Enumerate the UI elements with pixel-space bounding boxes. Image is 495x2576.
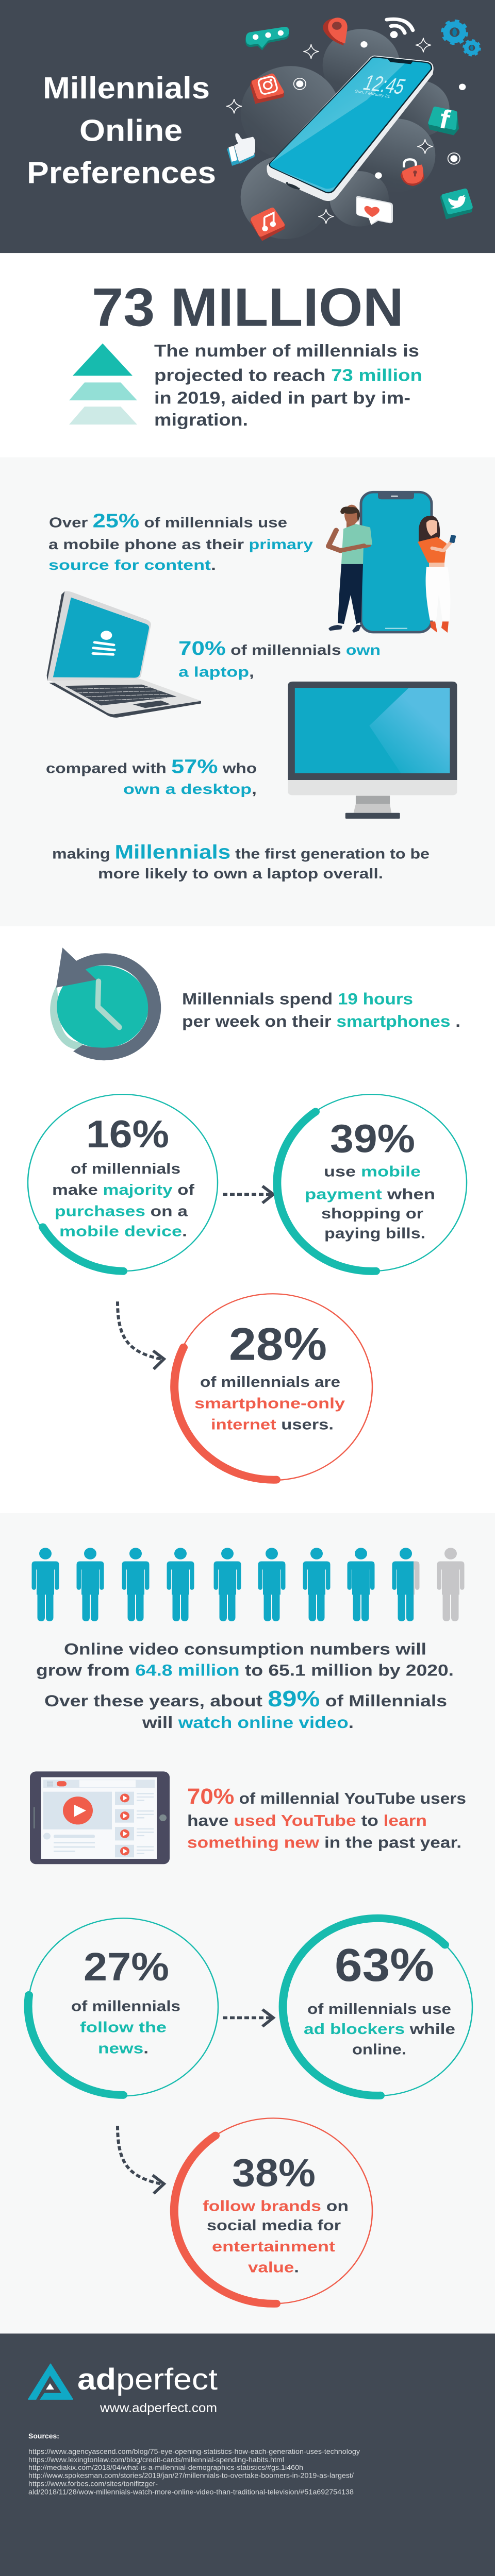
text: online video consumption: grow from 64.8 million to 65.1 million by 2020. bbox=[36, 1661, 454, 1679]
stat circle: 39 percent bbox=[277, 1094, 467, 1271]
arrow: 27 percent to 63 percent bbox=[223, 2009, 273, 2026]
stat circle: 16 percent: of millennials bbox=[71, 1161, 180, 1177]
text: sources: https://www.agencyascend.com/blog/75-eye-opening-statistics-how-each-generation-uses-technology bbox=[28, 2447, 360, 2455]
title: Millennials Online Preferences: Online bbox=[79, 114, 183, 147]
text: first generation to own a laptop: more likely to own a laptop overall. bbox=[98, 866, 383, 882]
figure: woman bbox=[418, 516, 456, 633]
text: sources: Sources: bbox=[28, 2432, 59, 2440]
text: 25 percent mobile phone: source for content . bbox=[48, 557, 216, 573]
stat circle: 63 percent: 63% bbox=[335, 1939, 434, 1991]
icon: smartphone: 12:45 bbox=[360, 71, 409, 99]
icon: facebook: f bbox=[437, 104, 453, 135]
stat circle: 27 percent bbox=[28, 1918, 218, 2096]
text: website: www.adperfect.com bbox=[100, 2400, 217, 2415]
icon: clock with arrow bbox=[50, 947, 161, 1060]
icon: laptop bbox=[47, 591, 201, 718]
stat circle: 16 percent bbox=[28, 1094, 218, 1271]
text: sources: http://mediakix.com/2018/04/what-is-a-millennial-demographics-statistics/#gs.1i460h bbox=[28, 2463, 303, 2471]
text: sources: ald/2018/11/28/wow-millennials-watch-more-online-video-than-traditional-television/#51a692754138 bbox=[28, 2488, 354, 2496]
arrow: curved to 28 percent bbox=[118, 1301, 164, 1369]
stat circle: 27 percent: news . bbox=[98, 2041, 148, 2057]
logo: adperfect: adperfect bbox=[77, 2363, 218, 2396]
text: online video consumption: will watch online video . bbox=[142, 1713, 354, 1732]
icon: gears bbox=[442, 21, 480, 55]
text: YouTube to learn: have used YouTube to learn bbox=[187, 1811, 427, 1829]
text: 57 percent own a desktop: own a desktop , bbox=[123, 782, 257, 798]
text: sources: https://www.forbes.com/sites/tonifitzger- bbox=[28, 2480, 158, 2488]
stat circle: 28 percent: 28% bbox=[229, 1318, 327, 1370]
icon: twitter bbox=[440, 189, 473, 219]
stat circle: 16 percent: purchases on a bbox=[55, 1203, 188, 1219]
stat circle: 38 percent bbox=[174, 2118, 372, 2303]
arrow: curved to 38 percent bbox=[118, 2126, 164, 2194]
stat circle: 38 percent: follow brands on bbox=[203, 2198, 349, 2214]
icon: instagram bbox=[250, 74, 284, 104]
stat circle: 27 percent: follow the bbox=[80, 2019, 167, 2036]
panel: devices bbox=[0, 457, 495, 926]
icon: wifi bbox=[387, 19, 413, 38]
text: projected number of millennials: in 2019, aided in part by im- bbox=[154, 388, 410, 408]
text: first generation to own a laptop: making Millennials the first generation to be bbox=[52, 841, 430, 863]
panel: footer bbox=[0, 2333, 495, 2576]
logo: adperfect bbox=[28, 2363, 218, 2400]
stat circle: 27 percent: of millennials bbox=[71, 1998, 180, 2014]
text: first generation to own a laptop bbox=[52, 841, 430, 882]
icon: chat bubble bbox=[245, 27, 289, 50]
text: online video consumption bbox=[36, 1639, 454, 1732]
stat circle: 39 percent: use mobile bbox=[324, 1163, 421, 1180]
stat circle: 16 percent: make majority of bbox=[52, 1182, 195, 1198]
text: 57 percent own a desktop: compared with 57% who bbox=[46, 756, 257, 777]
text: 25 percent mobile phone: Over 25% of millennials use bbox=[49, 510, 287, 532]
title: Millennials Online Preferences bbox=[27, 71, 216, 190]
stat circle: 28 percent: internet users. bbox=[211, 1417, 334, 1433]
icon: thumbs up bbox=[227, 133, 255, 166]
icon: padlock bbox=[401, 159, 424, 186]
text: 19 hours per week: Millennials spend 19 hours bbox=[182, 990, 413, 1008]
heading: 73 MILLION: 73 MILLION bbox=[92, 278, 404, 338]
stat circle: 28 percent: of millennials are bbox=[200, 1374, 340, 1391]
icon: giant phone bbox=[361, 492, 432, 632]
text: sources: http://www.spokesman.com/stories/2019/jan/27/millennials-to-overtake-boomers-in-2019-as-largest/ bbox=[28, 2471, 354, 2480]
title: Millennials Online Preferences: Preferences bbox=[27, 156, 216, 190]
text: 57 percent own a desktop bbox=[46, 756, 257, 798]
stat circle: 28 percent bbox=[173, 1294, 372, 1480]
stat circle: 16 percent: mobile device . bbox=[59, 1224, 187, 1240]
icon: facebook bbox=[428, 104, 459, 135]
title: Millennials Online Preferences: Millennials bbox=[43, 71, 210, 105]
icon: tablet with video player bbox=[30, 1771, 170, 1864]
panel: video and social bbox=[24, 1548, 473, 2308]
icon: stars bbox=[226, 38, 433, 224]
icon: desktop monitor bbox=[288, 682, 457, 819]
stat circle: 38 percent: value . bbox=[248, 2259, 299, 2276]
text: 25 percent mobile phone bbox=[48, 510, 313, 573]
text: YouTube to learn bbox=[187, 1785, 466, 1851]
panel: 73 million bbox=[0, 253, 495, 457]
text: projected number of millennials: projected to reach 73 million bbox=[154, 366, 422, 385]
stat circle: 38 percent: 38% bbox=[232, 2151, 316, 2195]
text: online video consumption: Online video consumption numbers will bbox=[64, 1639, 426, 1658]
arrow: 16 percent to 39 percent bbox=[223, 1186, 273, 1203]
icon: dots and rings bbox=[294, 41, 466, 179]
text: projected number of millennials: The number of millennials is bbox=[154, 341, 419, 361]
stat circle: 63 percent bbox=[283, 1918, 472, 2096]
icon: heart bubble bbox=[356, 196, 393, 225]
stat circle: 16 percent: 16% bbox=[86, 1113, 169, 1156]
text: 70 percent own a laptop: a laptop , bbox=[178, 664, 254, 680]
icon: location pin bbox=[323, 18, 348, 45]
text: 19 hours per week: per week on their smartphones . bbox=[182, 1012, 460, 1030]
stat circle: 63 percent: ad blockers while bbox=[304, 2021, 455, 2038]
text: online video consumption: Over these years, about 89% of Millennials bbox=[44, 1687, 447, 1711]
text: projected number of millennials: migration. bbox=[154, 410, 248, 430]
icon: music note bbox=[250, 208, 285, 241]
text: 70 percent own a laptop bbox=[178, 637, 381, 680]
stat circle: 39 percent: 39% bbox=[330, 1116, 415, 1161]
text: 19 hours per week bbox=[182, 990, 460, 1030]
panel: smartphone habits bbox=[0, 926, 495, 1513]
icon: smartphone bbox=[267, 56, 434, 201]
text: YouTube to learn: 70% of millennial YouTube users bbox=[187, 1785, 466, 1809]
stat circle: 27 percent: 27% bbox=[84, 1945, 169, 1989]
text: projected number of millennials bbox=[154, 341, 422, 430]
icon: smartphone: Sun, February 21 bbox=[354, 89, 391, 99]
stat circle: 63 percent: of millennials use bbox=[307, 2001, 451, 2018]
text: YouTube to learn: something new in the past year. bbox=[187, 1833, 461, 1851]
text: 70 percent own a laptop: 70% of millennials own bbox=[178, 637, 381, 659]
stat circle: 39 percent: paying bills. bbox=[324, 1225, 425, 1242]
panel: hero banner bbox=[0, 0, 495, 253]
stat circle: 63 percent: online. bbox=[352, 2041, 406, 2058]
text: sources bbox=[28, 2432, 360, 2496]
stat circle: 39 percent: payment when bbox=[305, 1186, 435, 1202]
stat circle: 38 percent: entertainment bbox=[212, 2239, 335, 2255]
illustration: smartphone with floating social icons bbox=[226, 18, 480, 241]
illustration: people with giant phone bbox=[328, 492, 456, 633]
stat circle: 38 percent: social media for bbox=[207, 2217, 341, 2234]
icon: stacked pyramid bbox=[69, 343, 137, 425]
pictogram: 89 percent of people bbox=[32, 1548, 464, 1621]
figure: man bbox=[328, 505, 372, 633]
text: 25 percent mobile phone: a mobile phone as their primary bbox=[48, 537, 313, 553]
stat circle: 28 percent: smartphone-only bbox=[194, 1395, 345, 1412]
text: sources: https://www.lexingtonlaw.com/blog/credit-cards/millennial-spending-habits.html bbox=[28, 2455, 284, 2464]
stat circle: 39 percent: shopping or bbox=[321, 1206, 423, 1222]
